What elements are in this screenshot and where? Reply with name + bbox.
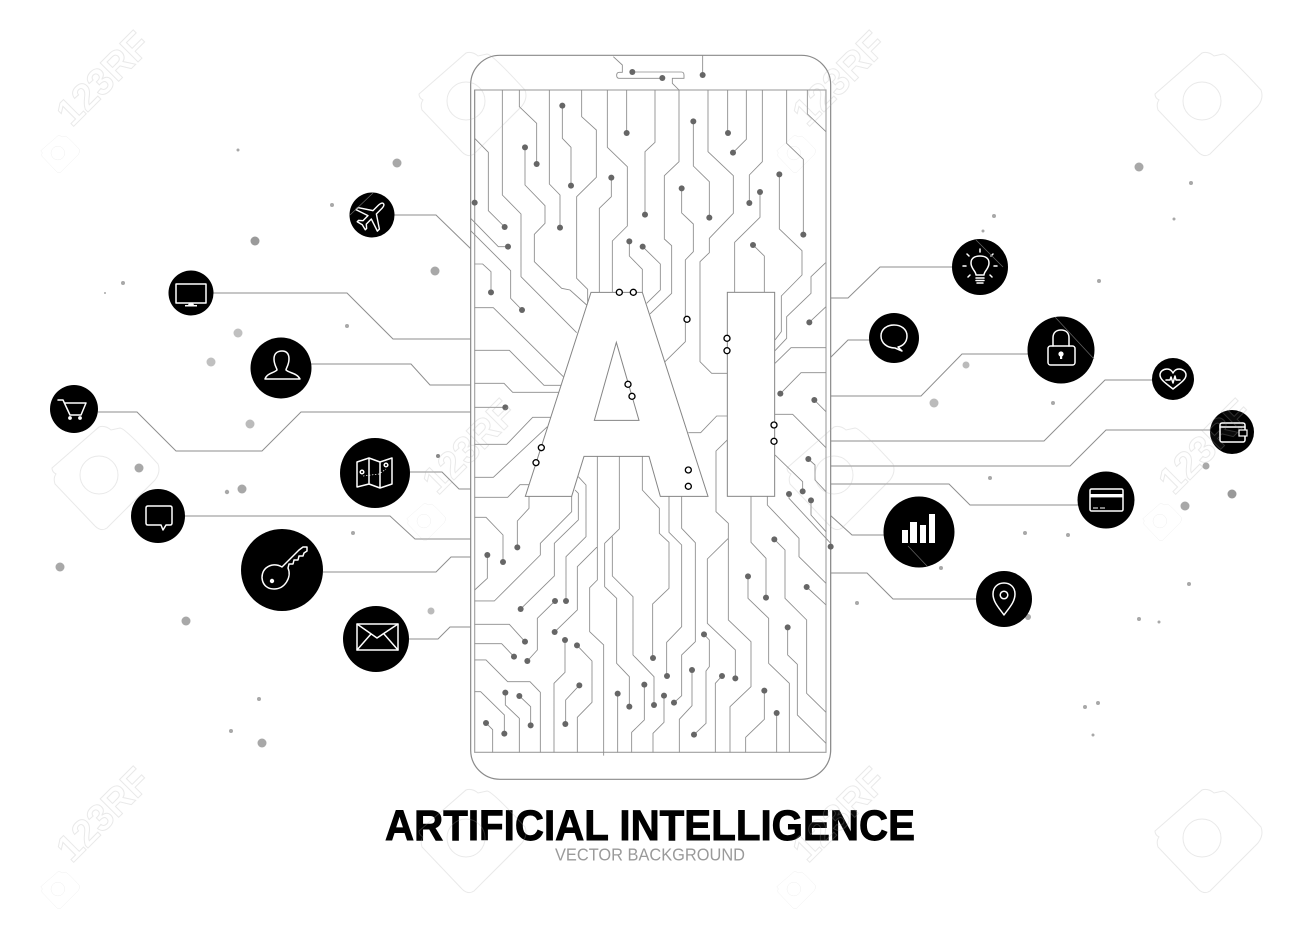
scattered background dots [56, 148, 1236, 748]
icon: credit card [1078, 472, 1134, 528]
icon: folded map [340, 438, 410, 508]
icon: padlock [1028, 316, 1094, 384]
watermark logos: 123RF [49, 760, 159, 870]
speaker notch [613, 57, 684, 90]
letter I [727, 292, 775, 496]
watermark logos: 123RF [415, 392, 525, 502]
icon: person [250, 338, 312, 398]
icon: speech balloon [869, 313, 919, 363]
watermark logos: 123RF [49, 24, 159, 134]
icon: shopping cart [50, 385, 98, 433]
icon: bar chart [884, 496, 954, 568]
icon: airplane [350, 192, 394, 238]
watermark logos: 123RF [785, 24, 895, 134]
phone body outline [471, 55, 831, 779]
watermark logos: 123RF [1151, 392, 1261, 502]
connector lines from icons to phone [98, 215, 1210, 639]
subtitle: VECTOR BACKGROUND [555, 844, 745, 864]
icon: location pin [976, 571, 1032, 627]
letter A [525, 292, 708, 496]
phone screen outline [475, 90, 826, 752]
trace end dots [472, 69, 834, 738]
smartphone with circuit board [471, 55, 834, 779]
title: ARTIFICIAL INTELLIGENCE [385, 802, 915, 850]
open circuit nodes [533, 289, 777, 489]
circuit traces [471, 55, 831, 756]
icon: chat bubble [131, 489, 185, 543]
icon: wallet [1210, 410, 1254, 454]
icon: monitor [168, 270, 214, 316]
icon: heart with pulse [1152, 358, 1194, 400]
icon: envelope [343, 606, 409, 672]
icon: key [241, 529, 323, 611]
watermark logos: 123RF [785, 760, 895, 870]
icon: light bulb [952, 239, 1008, 295]
